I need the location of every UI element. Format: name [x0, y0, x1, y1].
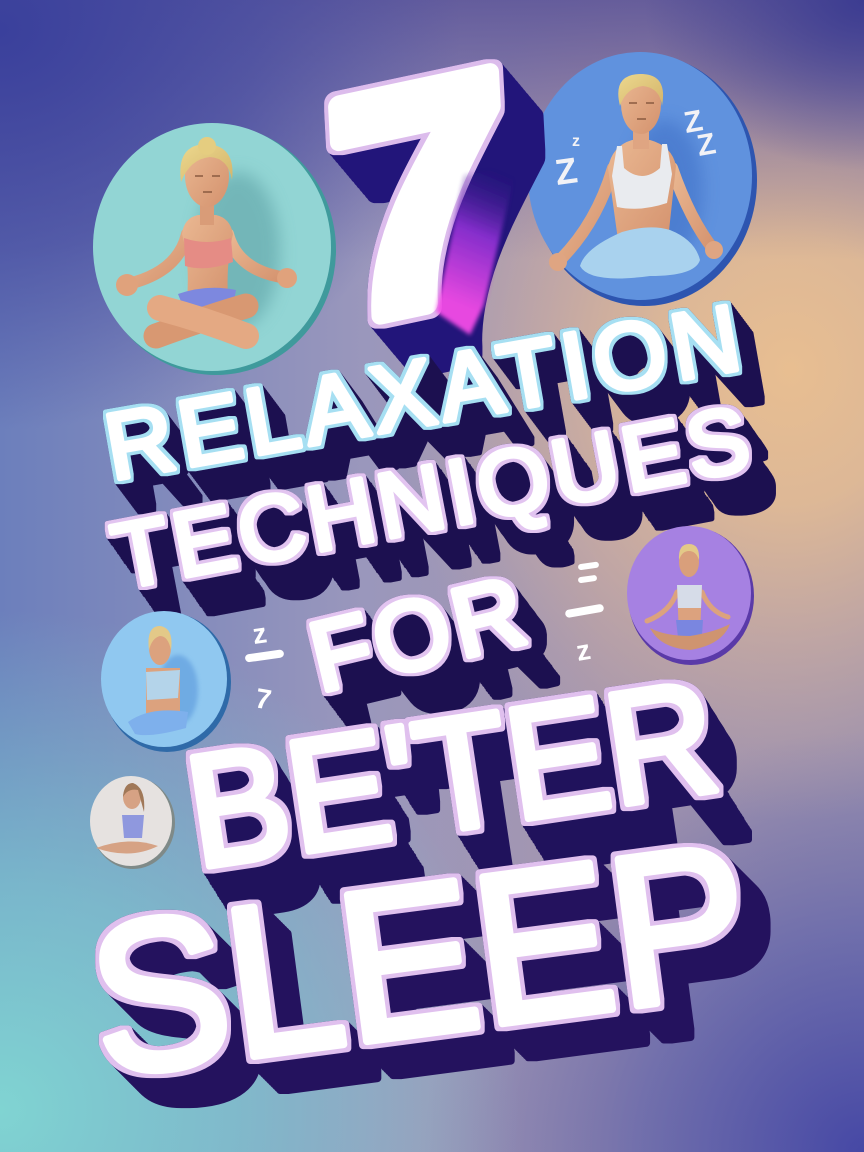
decoration: right z marks: [565, 561, 604, 667]
icon: z letters: z: [572, 133, 580, 150]
icon: z letters: Z: [694, 127, 718, 163]
heading: sleep: SLEEP: [77, 799, 762, 1122]
icon: purple disc with meditating figure: [627, 526, 754, 665]
icon: teal disc with meditating figure: [93, 123, 336, 375]
icon: z letters: Z: [681, 104, 705, 140]
decoration: left z marks: 7: [253, 682, 274, 716]
heading: for: FOR: [299, 555, 535, 712]
magenta highlight on 7 side: [436, 165, 517, 335]
icon: light blue disc with meditating figure: [101, 611, 231, 752]
icon: blue disc with meditating figure and z letters: [528, 52, 757, 306]
numeral 7: 7: [321, 4, 518, 391]
icon: z letters: [552, 104, 718, 193]
decoration: left z marks: z: [251, 617, 269, 650]
decoration: right z marks: z: [574, 634, 593, 667]
icon: z letters: Z: [552, 149, 580, 193]
heading: techniques: TECHNIQUES: [105, 388, 757, 609]
heading: better: BE'TER: [176, 646, 728, 902]
heading: relaxation: RELAXATION: [97, 285, 748, 500]
icon: grey disc with meditating figure: [90, 776, 175, 869]
decoration: left z marks: [245, 617, 284, 716]
